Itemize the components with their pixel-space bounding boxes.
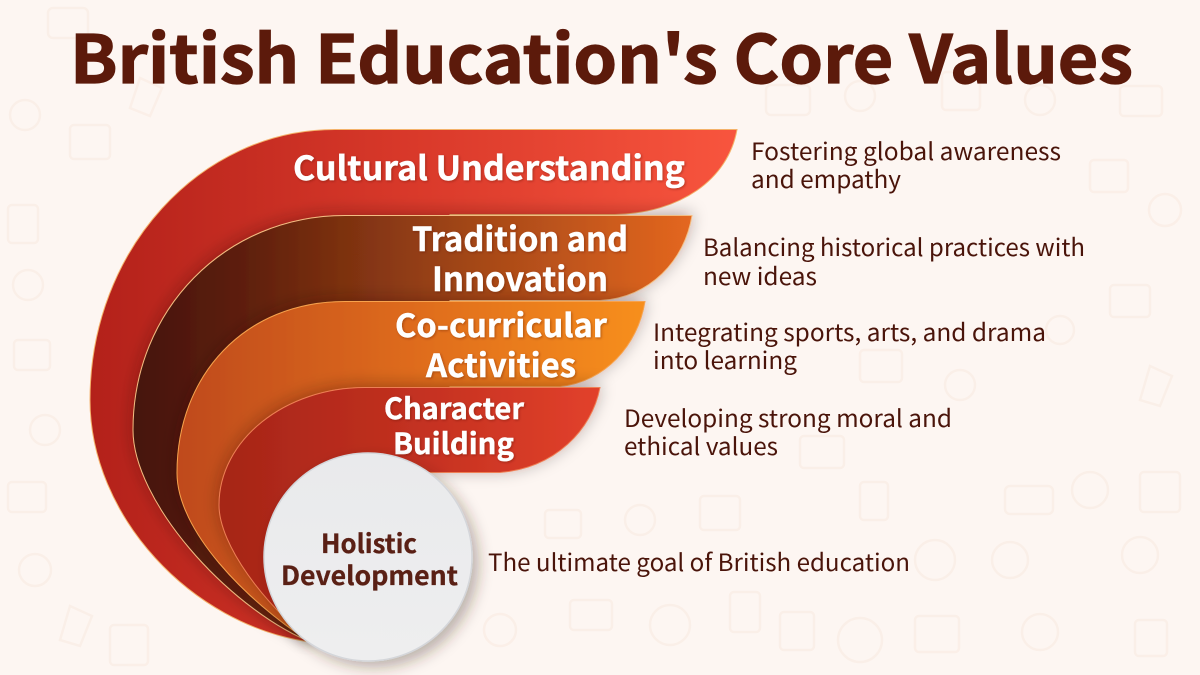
label: Tradition and Innovation: Innovation bbox=[432, 253, 608, 301]
circle: Holistic Development bbox=[264, 453, 472, 661]
description: Co-curricular Activities: into learning bbox=[653, 341, 797, 376]
label: Co-curricular Activities: Co-curricular bbox=[395, 301, 607, 347]
label: Character Building: Building bbox=[393, 421, 514, 463]
description: Character Building: ethical values bbox=[624, 427, 778, 462]
band: Character Building bbox=[219, 388, 600, 642]
band: Co-curricular Activities bbox=[177, 302, 645, 642]
description: Tradition and Innovation: Balancing historical practices with bbox=[703, 228, 1085, 263]
label: Character Building bbox=[384, 386, 524, 463]
band: Tradition and Innovation bbox=[133, 216, 692, 641]
description: Cultural Understanding: Fostering global awareness bbox=[751, 132, 1061, 167]
layered arc diagram bbox=[90, 130, 737, 642]
label: Co-curricular Activities: Activities bbox=[425, 341, 576, 387]
label: Tradition and Innovation: Tradition and bbox=[412, 213, 628, 261]
description: Cultural Understanding bbox=[751, 132, 1061, 195]
description: Character Building: Developing strong moral and bbox=[624, 399, 952, 434]
title: British Education's Core Values bbox=[70, 7, 1133, 103]
circle: Holistic Development: Development bbox=[281, 556, 458, 593]
label: Co-curricular Activities bbox=[395, 301, 607, 387]
description: Co-curricular Activities bbox=[653, 313, 1046, 376]
circle: Holistic Development: Holistic bbox=[321, 524, 417, 561]
description: Tradition and Innovation bbox=[703, 228, 1085, 292]
description: Co-curricular Activities: Integrating sports, arts, and drama bbox=[653, 313, 1046, 348]
label: Tradition and Innovation bbox=[412, 213, 628, 301]
description: Character Building bbox=[624, 399, 952, 462]
description: Tradition and Innovation: new ideas bbox=[703, 257, 817, 292]
description: Cultural Understanding: and empathy bbox=[751, 160, 901, 195]
band: Cultural Understanding bbox=[90, 130, 737, 642]
label: Cultural Understanding: Cultural Understanding bbox=[293, 142, 685, 190]
label: Character Building: Character bbox=[384, 386, 524, 428]
description: Holistic Development: The ultimate goal of British education bbox=[488, 543, 910, 578]
